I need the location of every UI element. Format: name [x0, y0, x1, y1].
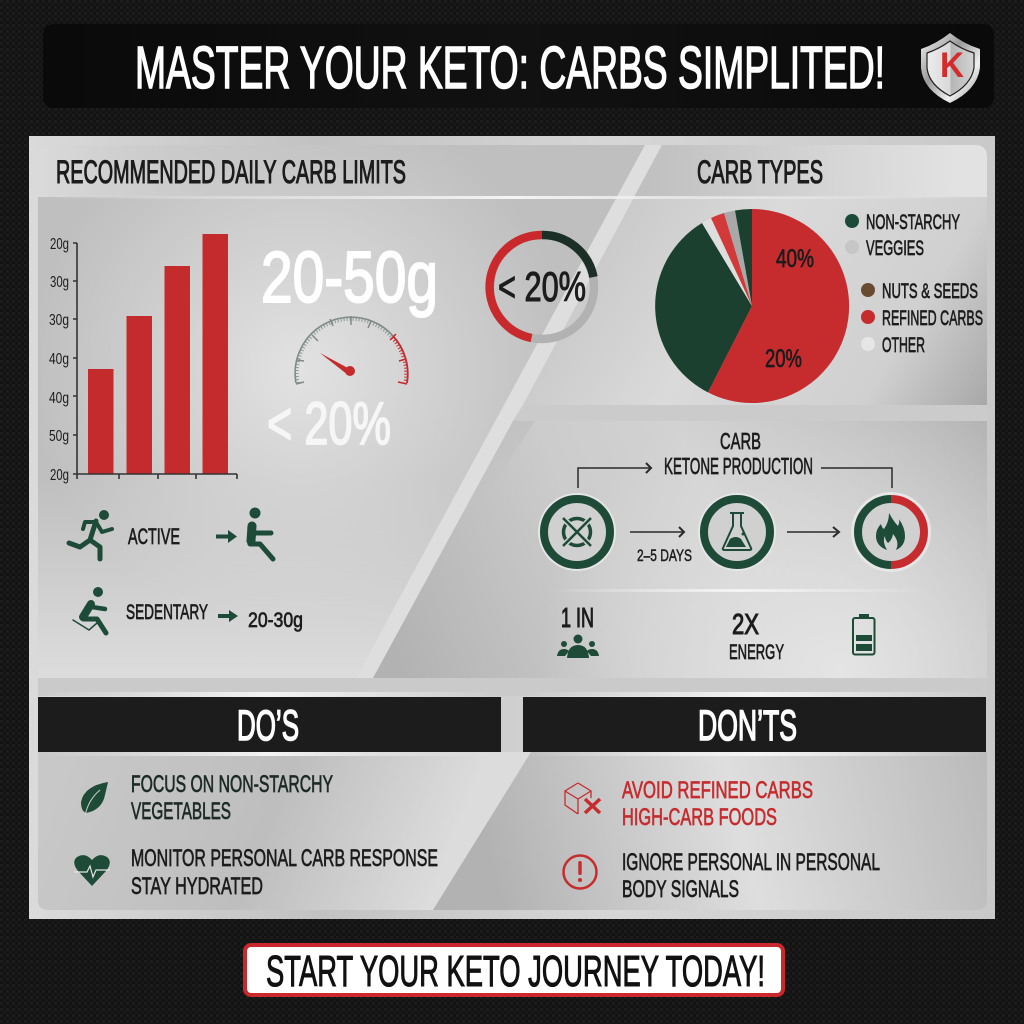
axis labels: 30g — [49, 312, 69, 329]
panel: band between carb types and process — [513, 405, 987, 421]
panel: process lower right highlight — [373, 421, 987, 678]
title bar — [43, 24, 994, 108]
icon: heart with pulse — [74, 855, 110, 886]
bar chart — [49, 234, 237, 484]
ring: under 20 percent: < 20% — [498, 263, 586, 310]
step 3: flame icon — [851, 492, 931, 572]
header: donts: DON’TS — [698, 702, 797, 750]
stat: 1 in — [557, 602, 599, 658]
text: monitor response and hydration — [131, 845, 438, 900]
icon: warning circle — [564, 856, 596, 888]
text: avoid refined carbs — [622, 777, 813, 831]
text: ignore body signals — [622, 849, 880, 903]
icon: K shield badge — [921, 33, 980, 103]
ring: under 20 percent — [490, 235, 594, 339]
activity rows — [69, 508, 303, 633]
arrow: active — [216, 530, 237, 543]
icon: gauge — [295, 316, 408, 384]
header: donts — [523, 692, 986, 756]
heading: carb types: CARB TYPES — [697, 154, 823, 190]
label: active: ACTIVE — [128, 524, 180, 549]
stat: 1 in: 1 IN — [561, 602, 594, 633]
legend: carb types: OTHER — [882, 334, 925, 357]
process diagram: ketone production — [538, 428, 931, 572]
heading: recommended daily carb limits: RECOMMENDED DAILY CARB LIMITS — [56, 154, 406, 190]
pie chart: carb types — [655, 209, 849, 403]
text: ignore body signals: IGNORE PERSONAL IN PERSONAL — [622, 849, 880, 876]
section rule — [550, 589, 930, 592]
bars — [88, 234, 228, 474]
axis labels: 20g — [50, 467, 69, 484]
pie chart: carb types: 20% — [765, 345, 802, 373]
stat: 2x energy: 2X — [732, 609, 759, 641]
legend: carb types — [845, 211, 983, 357]
connector arrows — [578, 463, 892, 537]
panel: process diagonal stripe — [454, 421, 535, 530]
panel: limits lower light fade — [38, 145, 645, 678]
icon: sedentary figure — [73, 587, 106, 633]
icon: seated figure — [250, 508, 273, 559]
label: 2-5 days: 2–5 DAYS — [637, 546, 692, 565]
heading: carb: CARB — [720, 428, 761, 454]
list: dos — [74, 771, 438, 900]
call to action button — [245, 945, 783, 996]
label: 20-30g: 20-30g — [248, 609, 303, 632]
text: monitor response and hydration: MONITOR PERSONAL CARB RESPONSE — [131, 845, 438, 872]
axis labels: 30g — [50, 274, 69, 291]
list: donts — [564, 777, 880, 903]
text: focus on vegetables: VEGETABLES — [131, 798, 231, 825]
section rule — [38, 196, 987, 199]
label: sedentary: SEDENTARY — [126, 601, 208, 624]
step 2: flask icon — [698, 493, 776, 571]
panel: carb types background — [523, 145, 987, 405]
legend: carb types: VEGGIES — [866, 237, 924, 260]
panel: daily carb limits background — [38, 145, 645, 678]
axis labels: 20g — [50, 236, 69, 253]
legend: carb types: NON-STARCHY — [866, 211, 960, 234]
panel: donts background — [433, 752, 987, 910]
text: focus on vegetables — [131, 771, 333, 825]
stat: 2x energy — [729, 609, 784, 664]
axis labels: 40g — [49, 390, 69, 407]
axis labels: 40g — [49, 351, 69, 368]
panel: ketone process background — [373, 421, 987, 678]
chart axes — [73, 243, 237, 479]
panel: limits heading sheen — [38, 145, 645, 197]
panel: dos background — [38, 752, 531, 910]
main metallic panel — [29, 136, 995, 919]
big stat: 20-50g: 20-50g — [261, 238, 438, 318]
big stat: under 20 percent: < 20% — [267, 390, 391, 457]
text: avoid refined carbs: AVOID REFINED CARBS — [622, 777, 813, 804]
text: avoid refined carbs: HIGH-CARB FOODS — [622, 804, 777, 831]
stat: 2x energy: ENERGY — [729, 641, 784, 664]
panel: carb types heading sheen — [634, 145, 987, 197]
icon: battery — [853, 614, 874, 654]
panel: diagonal light band — [356, 145, 662, 678]
text: focus on vegetables: FOCUS ON NON-STARCHY — [131, 771, 333, 798]
icon: K shield badge: K — [940, 46, 964, 85]
text: monitor response and hydration: STAY HYDRATED — [131, 873, 263, 900]
text: ignore body signals: BODY SIGNALS — [622, 876, 739, 903]
panel: strip above headers — [38, 678, 987, 696]
header: dos: DO’S — [237, 702, 299, 750]
icon: people — [557, 634, 599, 658]
step 1: carb reduction icon — [538, 493, 616, 571]
axis labels: 50g — [49, 428, 69, 445]
arrow: sedentary — [218, 610, 238, 622]
pie labels: 40% — [776, 245, 814, 273]
icon: box with x — [565, 783, 600, 814]
icon: leaf — [81, 782, 108, 816]
heading: ketone production: KETONE PRODUCTION — [664, 453, 813, 479]
axis labels — [49, 236, 69, 484]
panel: limits centre highlight — [38, 145, 645, 678]
header: dos — [38, 692, 501, 756]
icon: runner — [69, 510, 112, 559]
